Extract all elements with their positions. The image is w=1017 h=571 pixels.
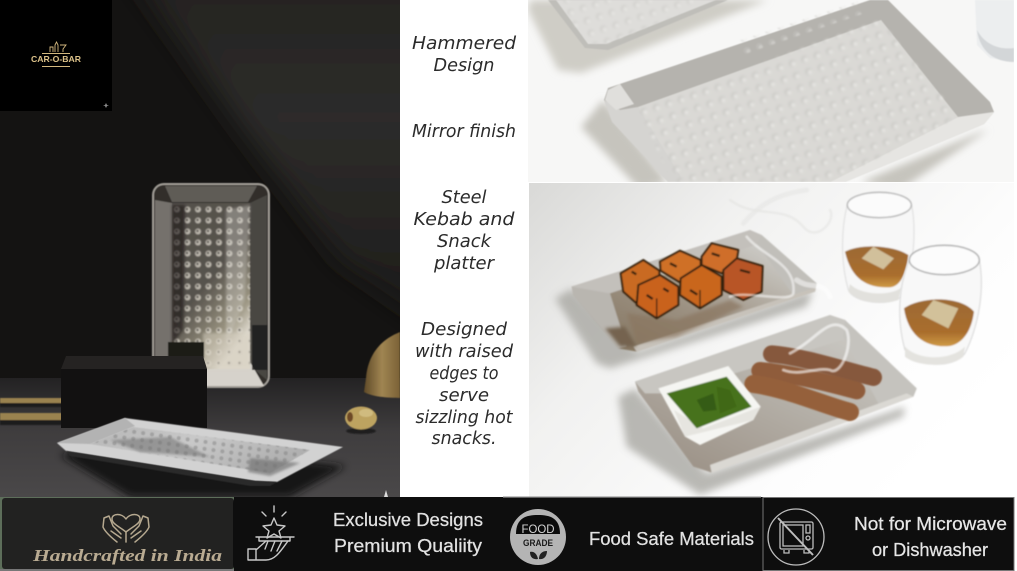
steam — [730, 190, 848, 372]
badge label: or Dishwasher — [872, 539, 988, 560]
black box — [61, 356, 207, 428]
feature: steel kebab and snack platter: Snack — [437, 231, 493, 252]
logo sparkle — [103, 103, 109, 108]
badge: food safe materials — [503, 496, 763, 571]
photo: hammered tray close-up — [528, 0, 1014, 190]
feature: raised edges: Designed — [421, 319, 508, 340]
icon: food grade seal: GRADE — [523, 538, 553, 549]
diagonal light on wall — [152, 0, 400, 291]
logo icon: bar glasses — [42, 42, 70, 66]
kebab tray — [635, 315, 917, 473]
upper tray — [528, 0, 768, 73]
feature: steel kebab and snack platter — [414, 187, 515, 274]
char marks on paneer — [632, 253, 750, 299]
badge label: Not for Microwave — [854, 513, 1007, 534]
badge label: Premium Qualiity — [334, 535, 483, 556]
water glass — [975, 0, 1014, 62]
flat hammered tray — [57, 418, 346, 497]
badge: exclusive designs — [233, 497, 503, 571]
whisky glass front — [900, 245, 981, 365]
table surface — [0, 378, 400, 497]
studio background — [529, 183, 918, 496]
badge label: Food Safe Materials — [589, 528, 754, 549]
feature: hammered design: Hammered — [412, 33, 517, 54]
icon: crossed microwave — [768, 509, 824, 565]
icon: star on tray — [248, 506, 294, 560]
feature: steel kebab and snack platter: Kebab and — [414, 209, 515, 230]
feature: hammered design: Design — [434, 55, 494, 76]
feature: raised edges: with raised — [415, 341, 514, 362]
badge label: Exclusive Designs — [333, 509, 483, 530]
badge: not for microwave — [763, 498, 1014, 570]
photo: trays on dark background — [0, 0, 400, 497]
icon: hands holding heart — [103, 514, 149, 542]
feature: steel kebab and snack platter: platter — [433, 253, 496, 274]
feature: hammered design — [412, 33, 517, 76]
main hammered tray — [604, 0, 994, 182]
badge label: Handcrafted in India — [32, 546, 223, 565]
standing hammered tray — [152, 183, 270, 388]
feature: mirror finish: Mirror finish — [412, 121, 516, 142]
olive — [345, 406, 377, 434]
feature: raised edges: snacks. — [432, 428, 496, 449]
main tray shadow — [581, 100, 988, 190]
footer strip behind badges — [0, 497, 1014, 571]
icon: food grade seal: FOOD — [522, 524, 554, 536]
feature: raised edges: serve — [439, 385, 489, 406]
logo panel — [0, 0, 112, 111]
gold sticks — [0, 398, 62, 425]
gold dome — [364, 332, 400, 398]
badge label — [854, 513, 1007, 560]
feature: raised edges — [415, 319, 514, 449]
feature: steel kebab and snack platter: Steel — [442, 187, 486, 208]
sparkle — [979, 465, 999, 485]
whisky glass back — [843, 192, 914, 303]
dark wall — [0, 0, 400, 380]
panel: feature list — [400, 0, 528, 497]
paneer cubes — [621, 243, 763, 318]
table background — [528, 0, 1014, 182]
feature: raised edges: edges to — [430, 363, 498, 384]
sparkle: left photo — [384, 490, 388, 497]
feature: raised edges: sizzling hot — [416, 407, 513, 428]
tray shadows — [555, 288, 905, 495]
chutney bowl — [658, 366, 761, 445]
footer badges — [0, 496, 1014, 571]
kebabs — [753, 354, 873, 412]
badge: handcrafted in India — [0, 497, 234, 571]
paneer tray — [572, 230, 817, 352]
icon: food grade seal — [510, 509, 566, 565]
photo: kebab and paneer platters — [529, 183, 1014, 497]
logo wordmark: CAR-O-BAR — [31, 54, 81, 64]
badge label — [333, 509, 483, 556]
